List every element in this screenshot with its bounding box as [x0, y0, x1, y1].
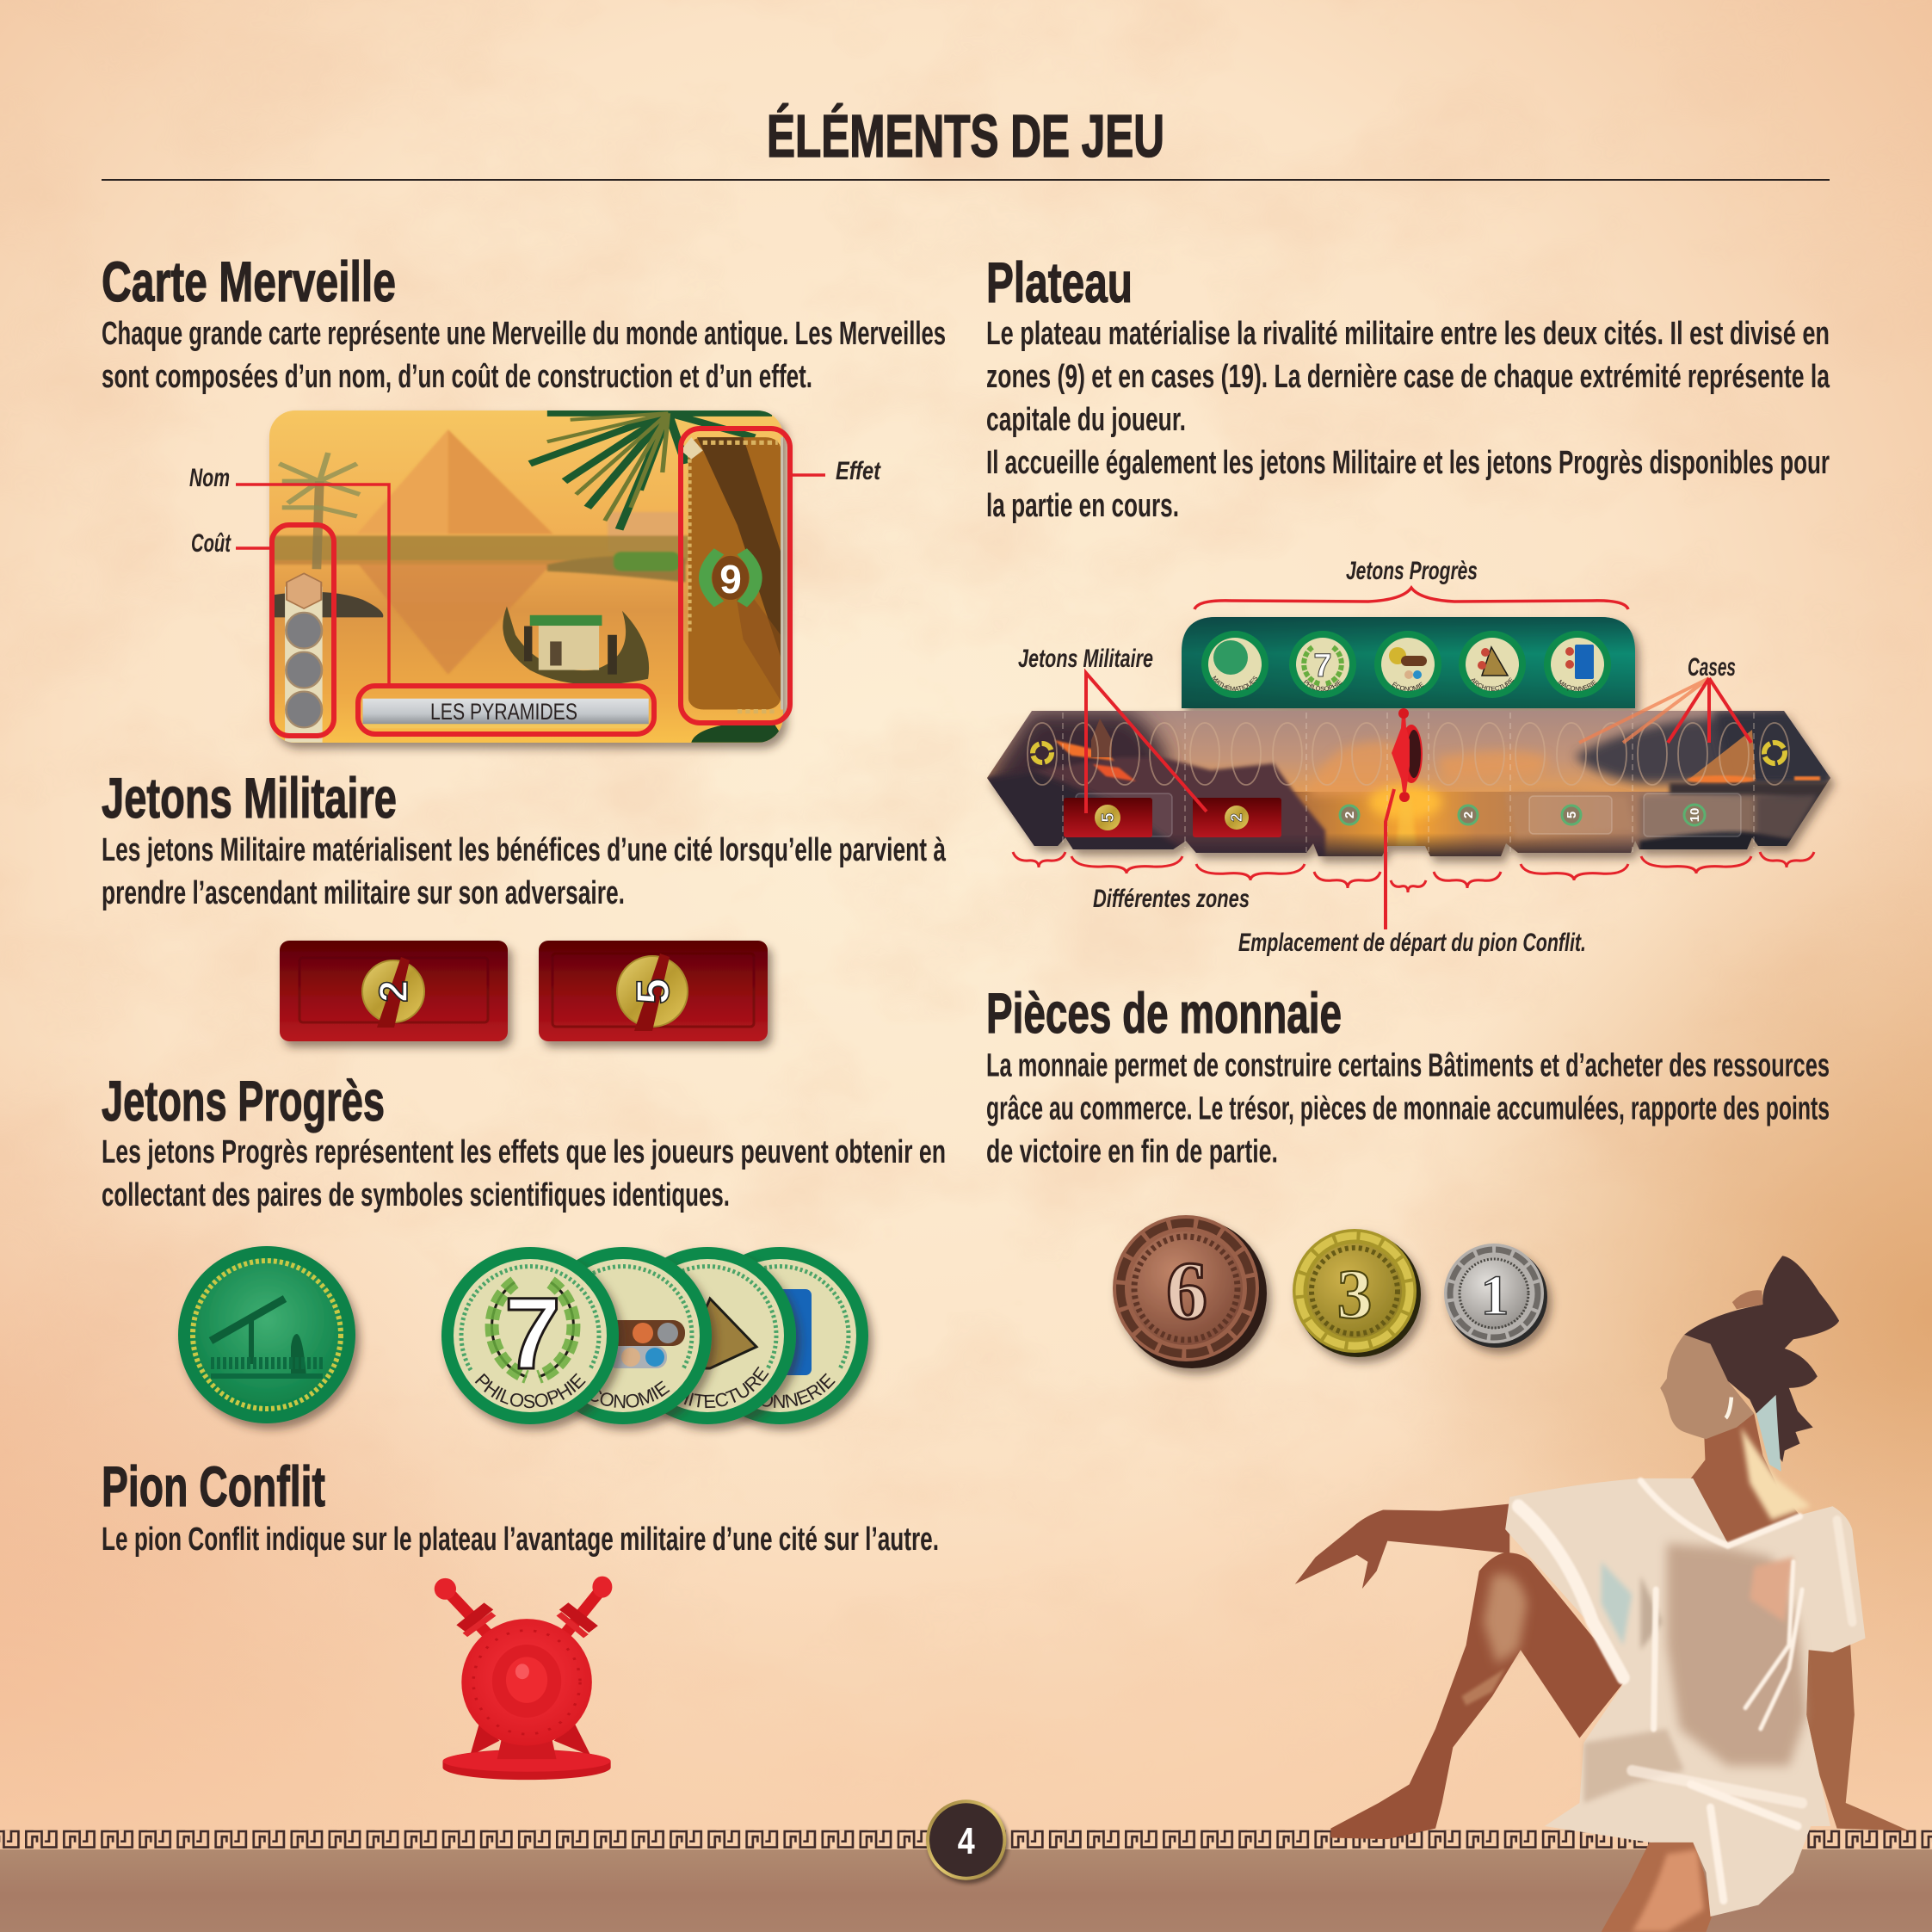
- label: jetons militaire: Jetons Militaire: [1018, 645, 1153, 673]
- heading: jetons progrès: Jetons Progrès: [102, 1069, 385, 1133]
- neck and chest: [1691, 1381, 1799, 1546]
- text: pièces de monnaie: [986, 1048, 1830, 1170]
- red callout: effet: [681, 429, 882, 723]
- face: [1660, 1335, 1754, 1439]
- token: maçonnerie: MAÇONNERIE: [762, 1373, 836, 1408]
- military token 2: [280, 941, 508, 1041]
- meander frieze: [0, 1830, 1932, 1849]
- progress tokens on tray: MATHÉMATIQUES: [1212, 676, 1258, 692]
- military tokens on board: [1064, 798, 1281, 837]
- token: économie: [534, 1247, 712, 1424]
- text: carte merveille: [102, 316, 946, 395]
- earring: [1725, 1398, 1731, 1418]
- label: emplacement de départ: Emplacement de départ du pion Conflit.: [1238, 929, 1586, 957]
- label: jetons progrès: Jetons Progrès: [1346, 557, 1478, 585]
- raised leg: [1330, 1552, 1627, 1839]
- stacked progress tokens: [441, 1247, 868, 1424]
- icon: conflict pawn: [435, 1577, 612, 1780]
- military token 5: 5: [627, 978, 679, 1004]
- progress tokens on tray: 7: [1313, 648, 1332, 684]
- panel: pièces de monnaie: [986, 981, 1830, 1368]
- token: philosophie: 7: [504, 1277, 561, 1391]
- progress tokens on tray: ÉCONOMIE: [1392, 682, 1424, 692]
- military tokens on board: 2: [1228, 813, 1245, 822]
- coin 1: [1444, 1244, 1547, 1348]
- progress tokens on tray: PHILOSOPHIE: [1303, 680, 1343, 692]
- red callout: coût: Coût: [191, 529, 231, 558]
- token: architecture: ARCHITECTURE: [683, 1367, 769, 1408]
- bottom band: [0, 1849, 1932, 1932]
- dress highlights: [1518, 1481, 1852, 1900]
- red callout: coût: [191, 525, 334, 736]
- token: économie: ÉCONOMIE: [590, 1380, 670, 1408]
- capital emblems: [1033, 743, 1785, 763]
- effect value: 9: [719, 557, 742, 602]
- coin 3: 3: [1337, 1255, 1372, 1333]
- heading: jetons militaire: Jetons Militaire: [102, 766, 397, 830]
- supporting arm: [1806, 1639, 1909, 1830]
- printed value badges: 5: [1565, 812, 1579, 818]
- zone separators: [1063, 713, 1754, 852]
- panel: jetons militaire: [102, 766, 947, 1041]
- title: ÉLÉMENTS DE JEU: [767, 102, 1164, 170]
- token: philosophie: [441, 1247, 619, 1424]
- red callout: effet: Effet: [836, 457, 882, 485]
- heading: pièces de monnaie: Pièces de monnaie: [986, 981, 1342, 1045]
- coin 3: [1293, 1229, 1421, 1357]
- military token 5: [539, 941, 768, 1041]
- illustration: seated woman: [1295, 1256, 1909, 1932]
- text: jetons progrès: Les jetons Progrès représentent les effets que les joueurs peuvent obtenir en: [102, 1134, 946, 1170]
- main board: [986, 711, 1831, 857]
- panel: carte merveille: [102, 250, 946, 743]
- red callout: nom: [189, 464, 654, 734]
- page number badge: 4: [958, 1820, 975, 1862]
- panel: pion conflit: [102, 1454, 939, 1780]
- label: emplacement de départ: [1238, 789, 1586, 957]
- conflict pawn on board: [1392, 708, 1423, 802]
- text: carte merveille: Chaque grande carte représente une Merveille du monde antique. Les Merveilles: [102, 316, 946, 352]
- panel: plateau: [986, 250, 1840, 957]
- text: pion conflit: Le pion Conflit indique sur le plateau l’avantage militaire d’une cité sur l’autre.: [102, 1522, 939, 1558]
- label: cases: [1579, 653, 1751, 743]
- heading: carte merveille: Carte Merveille: [102, 250, 396, 313]
- coin 6: [1113, 1215, 1267, 1368]
- heading: plateau: Plateau: [986, 250, 1133, 314]
- progress token back: [178, 1246, 355, 1423]
- hair: [1684, 1256, 1839, 1462]
- printed value badges: 2: [1343, 812, 1357, 818]
- text: jetons progrès: [102, 1134, 946, 1213]
- wonder card illustration: [269, 410, 787, 743]
- progress tokens on tray: ARCHITECTURE: [1470, 677, 1514, 691]
- text: carte merveille: sont composées d’un nom, d’un coût de construction et d’un effet.: [102, 359, 812, 395]
- printed value badges: 2: [1461, 812, 1476, 818]
- label: jetons progrès: [1194, 557, 1628, 609]
- label: différentes zones: Différentes zones: [1093, 885, 1250, 913]
- progress tokens tray: [1182, 617, 1635, 708]
- printed value badges: 10: [1688, 808, 1702, 822]
- text: jetons progrès: collectant des paires de symboles scientifiques identiques.: [102, 1177, 730, 1213]
- text: plateau: capitale du joueur.: [986, 402, 1186, 438]
- military tokens on board: 5: [1099, 812, 1118, 823]
- token: maçonnerie: [691, 1247, 868, 1424]
- military token 2: 2: [371, 980, 416, 1003]
- label: cases: Cases: [1688, 653, 1736, 682]
- board diagram: [986, 557, 1840, 957]
- ghost token slots: [1076, 793, 1741, 836]
- page number badge: [926, 1799, 1009, 1884]
- lower leg: [1602, 1840, 1713, 1932]
- text: jetons militaire: [102, 832, 947, 911]
- token: philosophie: PHILOSOPHIE: [475, 1373, 586, 1408]
- label: jetons militaire: [1018, 645, 1207, 813]
- progress tokens on tray: MAÇONNERIE: [1558, 680, 1597, 691]
- text: plateau: la partie en cours.: [986, 488, 1179, 524]
- panel: jetons progrès: [102, 1069, 946, 1424]
- heading: pion conflit: Pion Conflit: [102, 1454, 325, 1518]
- dress folds: [1583, 1543, 1806, 1803]
- printed value badges: [1340, 805, 1705, 825]
- text: plateau: [986, 316, 1830, 524]
- progress tokens on tray: [1201, 631, 1611, 698]
- track spaces: [1028, 723, 1789, 785]
- raised arm: [1295, 1504, 1509, 1589]
- card name: LES PYRAMIDES: [430, 699, 577, 725]
- token: architecture: [619, 1247, 796, 1424]
- text: pièces de monnaie: de victoire en fin de partie.: [986, 1134, 1278, 1170]
- text: jetons militaire: Les jetons Militaire matérialisent les bénéfices d’une cité lorsqu’elle parvient à: [102, 832, 947, 868]
- red callout: nom: Nom: [189, 464, 230, 492]
- coin 1: 1: [1480, 1264, 1509, 1327]
- text: jetons militaire: prendre l’ascendant militaire sur son adversaire.: [102, 875, 625, 911]
- coin 6: 6: [1166, 1244, 1207, 1336]
- zone braces: [1013, 852, 1814, 892]
- dress: [1505, 1478, 1866, 1917]
